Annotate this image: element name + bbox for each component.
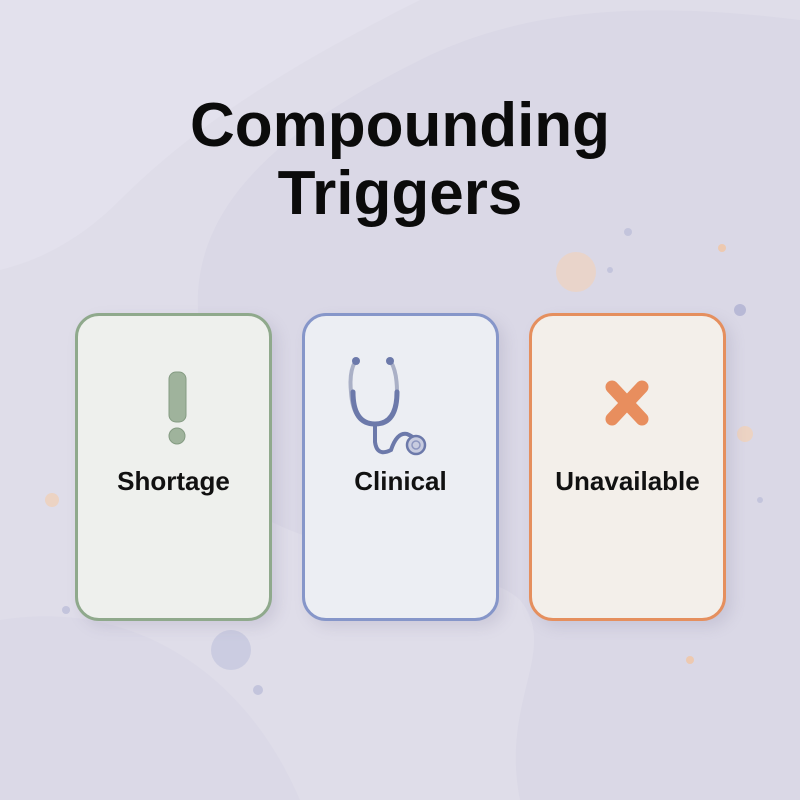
title: [190, 91, 610, 228]
panel: unavailable: [529, 313, 726, 621]
label: Shortage: [117, 466, 230, 496]
label: Unavailable: [555, 466, 700, 496]
icon: exclamation: [168, 372, 186, 444]
panel: clinical: [302, 313, 499, 621]
icon: stethoscope: [348, 357, 426, 456]
label: Clinical: [354, 466, 447, 496]
title: Compounding: [190, 91, 610, 160]
title: Triggers: [278, 159, 522, 228]
icon: x mark: [606, 380, 648, 426]
panel: shortage: [75, 313, 272, 621]
